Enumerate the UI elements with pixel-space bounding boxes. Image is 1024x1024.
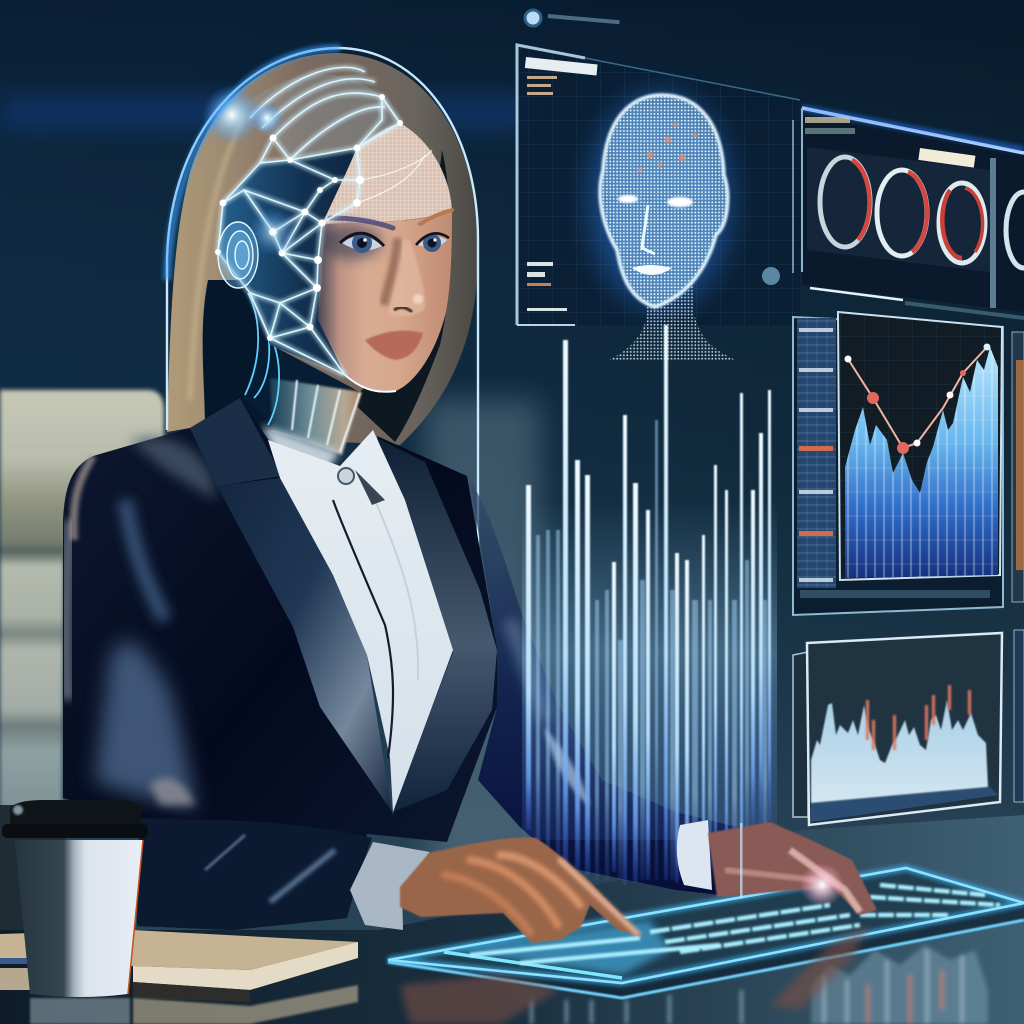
column series: [811, 700, 988, 803]
suit jacket: [63, 398, 741, 930]
red trend line: [844, 344, 990, 454]
lips: [365, 331, 423, 360]
panel header bar: [525, 57, 598, 75]
nose: [384, 238, 425, 316]
collar wing: [355, 470, 385, 505]
woman's face: [318, 123, 452, 393]
keyboard light rows: [470, 885, 1000, 963]
nodes: [215, 94, 403, 341]
dashboard panel: hologram head: [517, 10, 800, 325]
office chair: [0, 390, 164, 930]
desk: [0, 815, 1024, 1024]
gauge ring 2: [877, 170, 927, 256]
neck: [243, 293, 362, 480]
glass keyboard: [388, 868, 1024, 998]
soft background bars: [536, 420, 767, 880]
gauge ring 1: [820, 157, 870, 247]
forehead mesh: [322, 123, 452, 224]
panel list text lines: [527, 76, 557, 95]
vertical light bars: [522, 325, 777, 903]
bright bars: [526, 325, 771, 903]
coffee cup: [2, 800, 148, 1024]
shirt button: [338, 468, 354, 484]
holographic visor outline: [167, 48, 478, 590]
left lapel: [217, 478, 392, 812]
right hand: [677, 820, 877, 915]
right arm sleeve: [470, 480, 741, 895]
desk reflection of bars: [530, 945, 988, 1024]
eye shadow: [322, 224, 382, 260]
woman's hair: [167, 53, 478, 445]
gauge ring 4: [1006, 192, 1024, 268]
top title bar: [548, 14, 620, 24]
forearm: [137, 818, 372, 930]
side data table: [797, 318, 836, 588]
dashboard panel: bar chart: [793, 633, 1002, 825]
sleeve highlights: [66, 438, 215, 810]
red highlights: [866, 685, 971, 750]
collar: [190, 398, 282, 486]
glow flares: [202, 85, 297, 256]
area series: [845, 347, 998, 578]
hologram brain sparks: [638, 123, 697, 172]
round status icon: [525, 10, 541, 26]
right lapel: [377, 438, 497, 812]
notebook: [0, 930, 358, 1024]
neural wireframe on head: [202, 67, 403, 392]
hologram head: [588, 92, 738, 361]
gauge ring 3: [939, 183, 985, 263]
bars haze: [522, 500, 777, 840]
desk reflection of hands: [400, 925, 870, 1024]
left hand: [400, 837, 643, 943]
eyebrows: [330, 210, 452, 228]
right edge panels: [1012, 332, 1024, 802]
eyes: [340, 233, 449, 253]
panel small data rows: [527, 262, 567, 311]
hologram facial features: [618, 195, 693, 275]
dashboard panel: gauges: [793, 108, 1024, 318]
ear rings: [218, 222, 258, 288]
dashboard panel: area chart: [793, 312, 1003, 615]
white cuff: [350, 842, 430, 930]
white shirt: [268, 430, 453, 812]
